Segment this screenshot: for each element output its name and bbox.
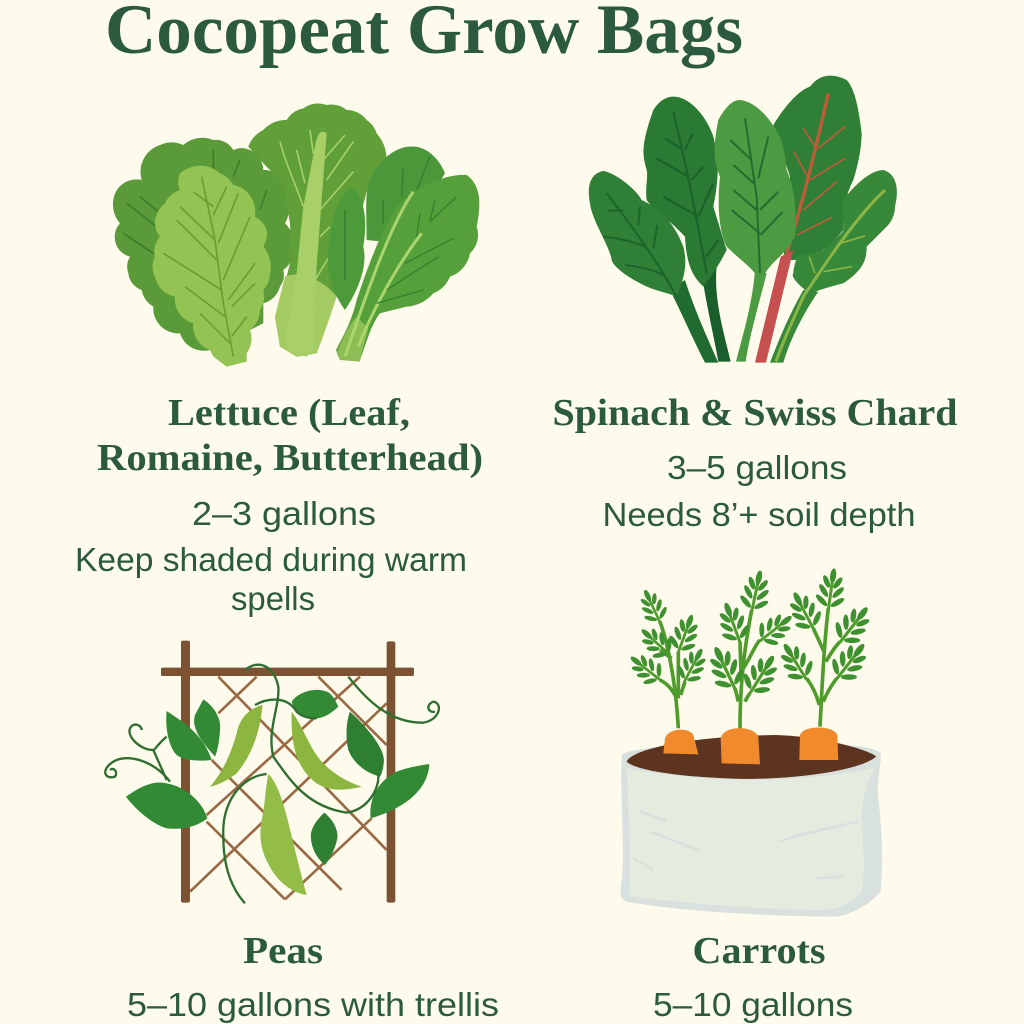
heading: peas: Peas [243,930,323,972]
text: spinach note: Needs 8’+ soil depth [602,496,916,533]
icon: peas on trellis [105,641,439,903]
panel: carrots [620,566,882,1023]
text: lettuce note: Keep shaded during warm [75,541,467,578]
panel: peas [105,641,499,1023]
icon: carrots in grow bag [620,566,882,917]
heading: lettuce line 2: Romaine, Butterhead) [97,437,483,479]
heading: lettuce: Lettuce (Leaf, [168,392,410,434]
text: lettuce note line 2: spells [231,580,315,617]
text: lettuce size: 2–3 gallons [192,495,376,532]
panel: lettuce [75,103,483,617]
heading: spinach and chard: Spinach & Swiss Chard [552,392,958,434]
text: spinach size: 3–5 gallons [667,449,847,486]
heading: carrots: Carrots [692,930,826,972]
panel: spinach and chard [552,76,958,533]
text: carrots size: 5–10 gallons [653,986,853,1023]
icon: spinach and chard [589,76,897,363]
icon: lettuce [113,103,479,367]
text: peas size: 5–10 gallons with trellis [127,986,499,1023]
